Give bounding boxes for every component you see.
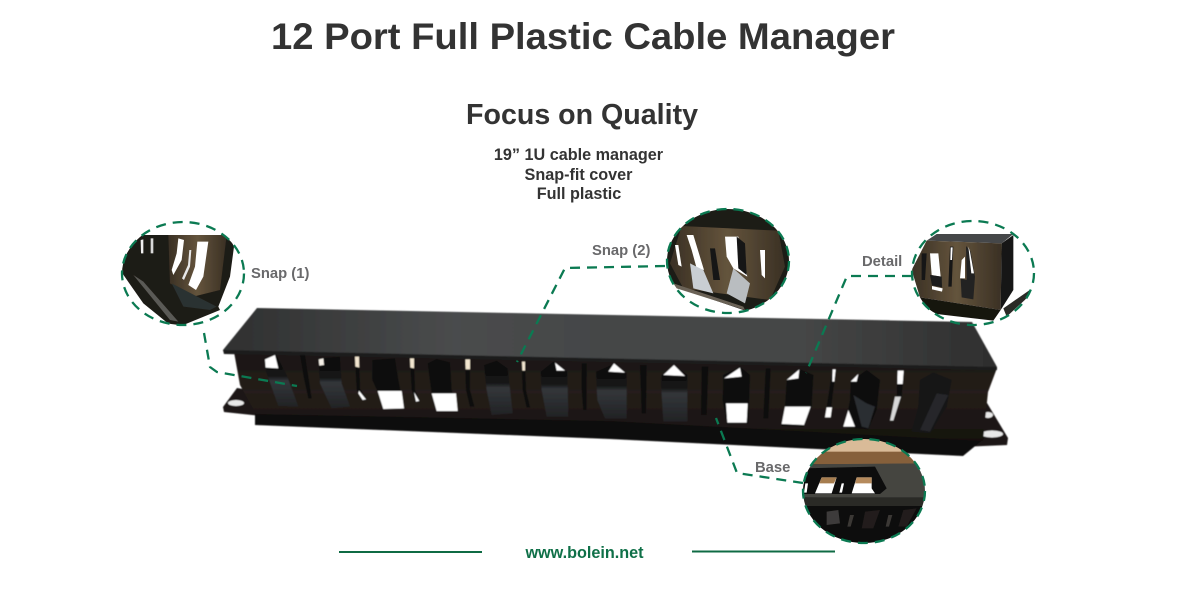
detail photo: Detail xyxy=(912,234,1032,321)
detail photo: Snap (2) xyxy=(667,209,789,310)
leader: Snap (2) xyxy=(517,266,665,362)
title: 12 Port Full Plastic Cable Manager xyxy=(271,15,895,57)
leader: Base xyxy=(716,418,803,483)
label: Detail: Detail xyxy=(862,254,902,270)
feature list xyxy=(494,146,664,203)
left holes xyxy=(265,355,587,417)
top cover xyxy=(223,308,997,370)
detail photo: Snap (1) xyxy=(120,235,234,325)
cable manager product xyxy=(223,308,1008,456)
front face xyxy=(234,352,997,441)
cover lip xyxy=(223,350,997,370)
feature list: 19” 1U cable manager xyxy=(494,146,664,164)
feature list: Full plastic xyxy=(537,185,621,203)
base strip xyxy=(255,412,985,456)
ring: Base xyxy=(803,439,925,543)
ring: Snap (1) xyxy=(122,222,244,325)
mounting flanges xyxy=(223,388,1008,447)
website url: www.bolein.net xyxy=(524,544,644,562)
subtitle: Focus on Quality xyxy=(466,99,698,131)
right holes xyxy=(596,363,952,433)
ring: Detail xyxy=(912,221,1034,325)
label: Snap (1): Snap (1) xyxy=(251,266,309,282)
label: Base: Base xyxy=(755,460,790,476)
feature list: Snap-fit cover xyxy=(525,166,633,184)
ring: Snap (2) xyxy=(667,209,789,313)
leader: Detail xyxy=(806,276,912,373)
leader: Snap (1) xyxy=(204,333,297,386)
label: Snap (2): Snap (2) xyxy=(592,243,650,259)
detail photo: Base xyxy=(803,439,925,543)
